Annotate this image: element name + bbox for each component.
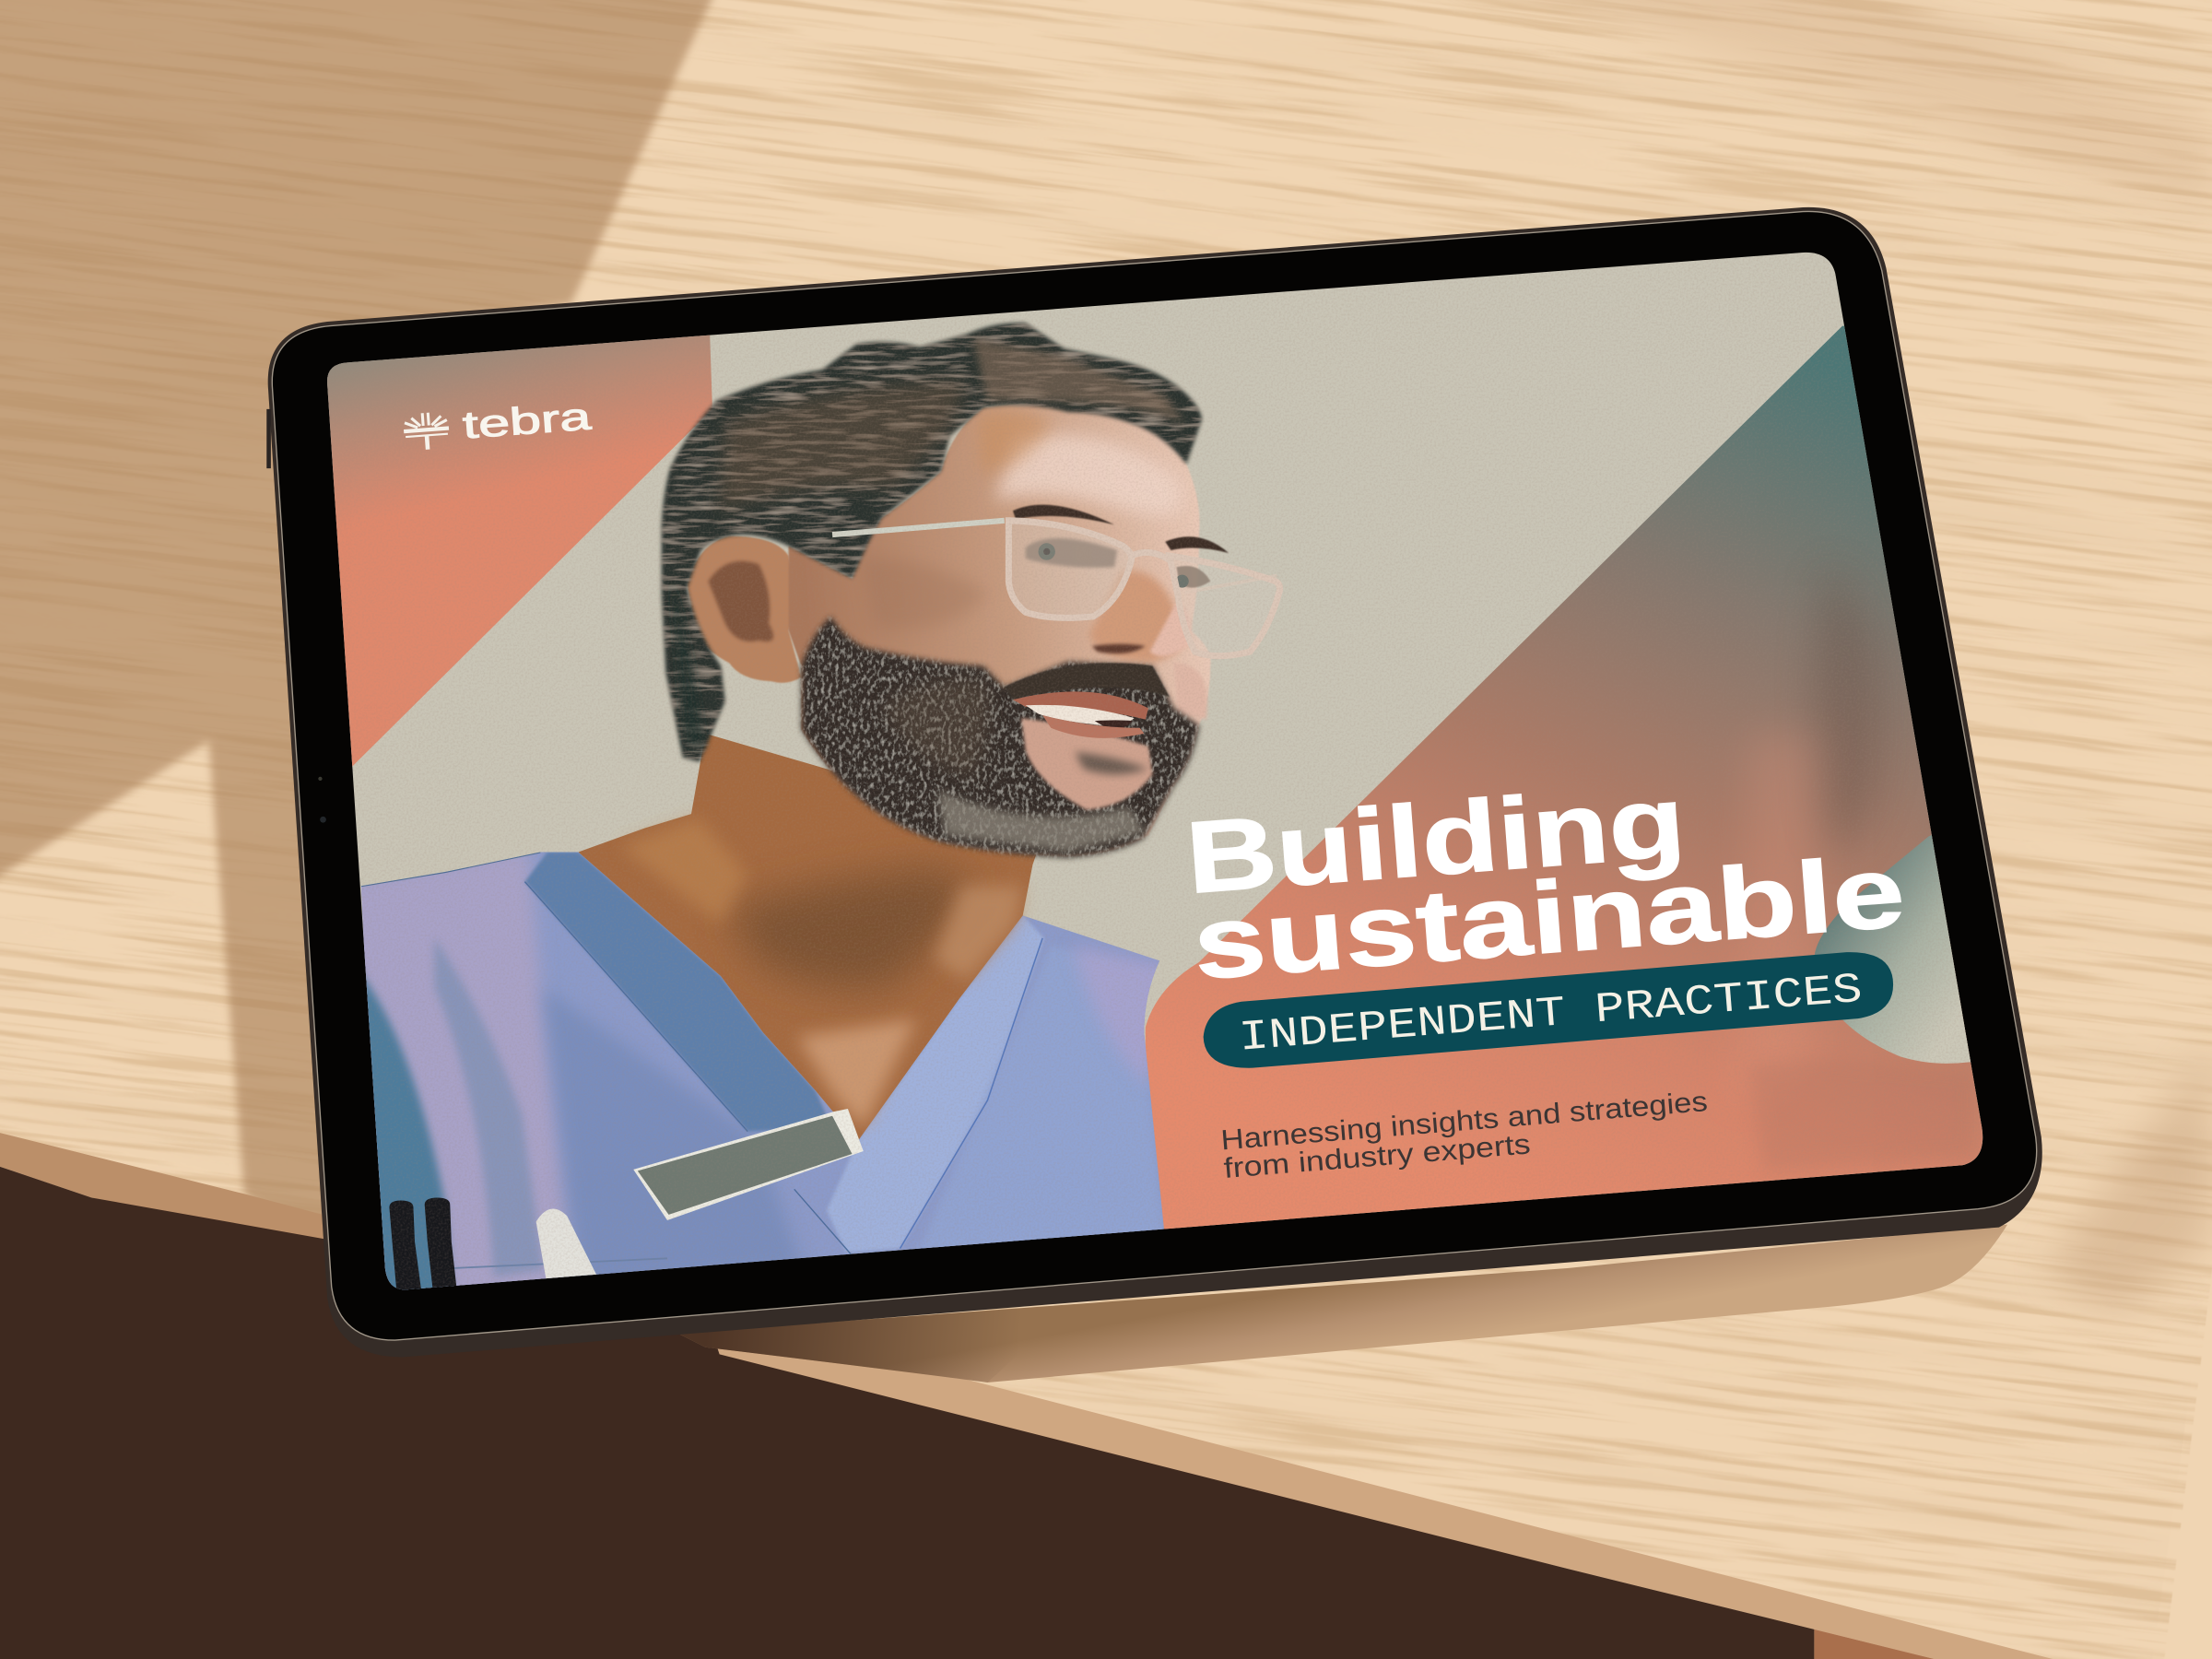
logo wordmark: tebra [461, 395, 593, 447]
title [1182, 765, 1909, 1001]
pill: independent practices [1204, 952, 1893, 1068]
title line 1: Building [1182, 765, 1688, 915]
pens in pocket [389, 1197, 598, 1305]
desk edge and dark floor [0, 1133, 2053, 1659]
tablet screen [317, 247, 1996, 1312]
face [789, 403, 1211, 856]
screen surface grain [317, 247, 1996, 1298]
logo [402, 395, 593, 451]
salmon corner shape [317, 327, 712, 769]
mouth [1013, 691, 1148, 738]
gradient diagonal panel [1146, 326, 1996, 1241]
tablet device [266, 207, 2042, 1357]
tablet cast shadow [677, 1225, 2007, 1382]
glasses [832, 521, 1280, 656]
screen background [317, 247, 1996, 1298]
pale circle segment [1814, 835, 1971, 1064]
ear [687, 536, 801, 683]
neck and chest [579, 734, 1044, 1141]
side buttons and camera dots [266, 409, 326, 823]
eyes [1026, 538, 1210, 588]
beard [801, 617, 1199, 858]
hair highlights [672, 338, 1185, 747]
eyebrows [1013, 505, 1229, 553]
subtitle [1219, 1086, 1709, 1184]
logo mark [403, 411, 451, 451]
skin below lip [1021, 718, 1153, 810]
photo: doctor [346, 323, 1280, 1312]
title line 2: sustainable [1190, 835, 1909, 1001]
name badge [633, 1109, 864, 1220]
tablet bezel [272, 211, 2037, 1340]
subtitle line 2: from industry experts [1222, 1128, 1532, 1184]
subtitle line 1: Harnessing insights and strategies [1219, 1086, 1709, 1156]
hair [662, 323, 1202, 762]
scrubs [346, 846, 1171, 1312]
moustache [1005, 663, 1170, 700]
tablet body [268, 207, 2042, 1357]
pill: independent practices: INDEPENDENT PRACTICES [1237, 966, 1864, 1063]
